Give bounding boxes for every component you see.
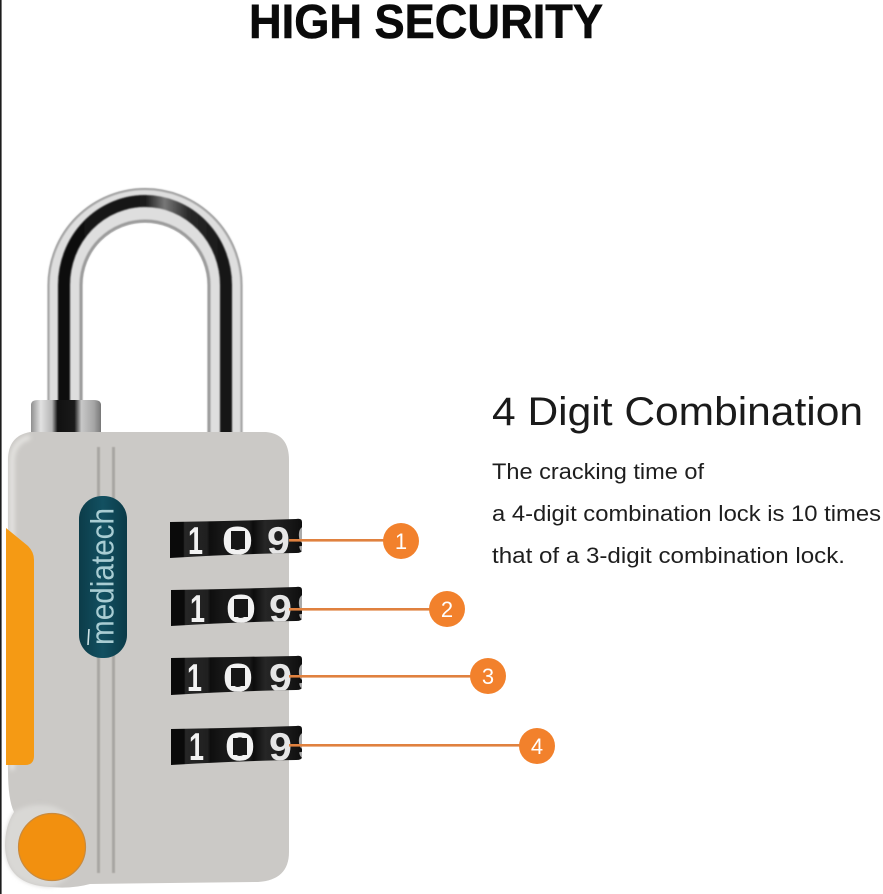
left edge line	[0, 0, 2, 894]
dial 4: 0	[225, 726, 255, 769]
dial 4: 1	[189, 726, 204, 769]
callout 1: 1	[395, 529, 407, 554]
callout 2	[289, 591, 465, 627]
description text: that of a 3-digit combination lock.	[492, 543, 845, 568]
dial 1: 0	[222, 520, 253, 563]
brand badge	[79, 496, 127, 658]
shackle collar	[31, 400, 101, 435]
dial 4: 9	[298, 725, 312, 766]
dial 2: 9	[298, 587, 312, 628]
dial 4	[171, 726, 302, 765]
body top highlight	[55, 443, 284, 445]
orange button	[5, 805, 86, 887]
body left highlight	[12, 437, 30, 770]
brand badge: mediatech	[84, 508, 120, 645]
dial 1	[170, 518, 302, 558]
dial 2	[171, 586, 302, 626]
dial 3: 0	[223, 657, 253, 700]
dial 3: 9	[298, 656, 312, 697]
description text: a 4-digit combination lock is 10 times	[492, 501, 881, 526]
dial 1: 9	[298, 519, 312, 560]
dial 4: 9	[269, 726, 292, 769]
dial 3: 1	[187, 657, 202, 700]
lock body	[5, 432, 289, 888]
dial 1: 9	[267, 520, 290, 563]
shackle	[48, 189, 242, 434]
callout 2: 2	[441, 597, 453, 622]
callout 3: 3	[482, 664, 494, 689]
description text	[492, 459, 881, 568]
callout 4	[289, 728, 555, 764]
padlock illustration	[5, 189, 312, 888]
vertical grooves	[97, 447, 115, 873]
callout 1	[289, 523, 419, 559]
callout 4: 4	[531, 734, 543, 759]
dial 2: 1	[190, 588, 205, 631]
heading: 4 Digit Combination: 4 Digit Combination	[492, 390, 863, 434]
dial 2: 0	[226, 588, 256, 631]
orange side strip	[6, 528, 34, 765]
description text: The cracking time of	[492, 459, 705, 484]
callout 3	[289, 658, 506, 694]
dial 3: 9	[269, 657, 292, 700]
dial 2: 9	[269, 588, 292, 631]
dial 1: 1	[188, 520, 203, 563]
dial 3	[171, 656, 302, 695]
